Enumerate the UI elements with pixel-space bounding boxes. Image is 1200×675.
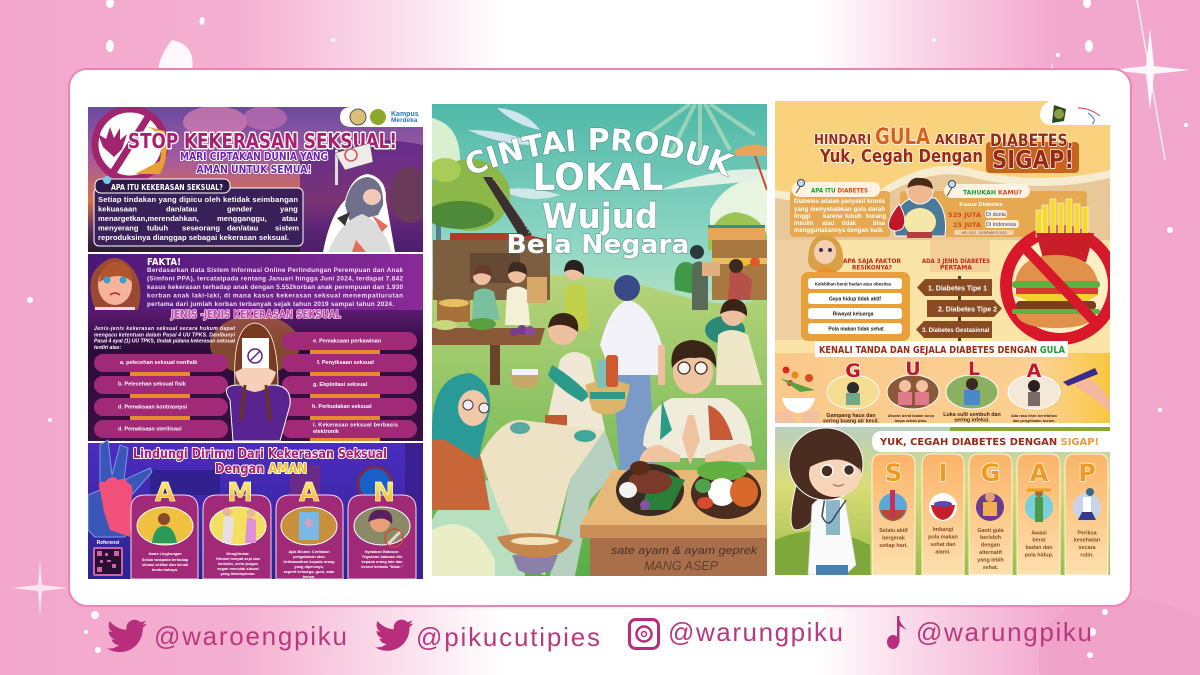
text: definition box: dan/atau	[166, 204, 198, 214]
qr code reference	[93, 540, 123, 576]
card: I: alami.	[935, 550, 951, 556]
banner heading	[872, 431, 1110, 452]
panel: apa itu diabetes: atau	[822, 221, 835, 227]
captions: dan penglihatan buram.	[1013, 419, 1055, 423]
icon: twitter bird 1	[107, 620, 147, 652]
title: LOKAL	[532, 156, 664, 199]
card: ajak bicara: pengalaman atau	[293, 554, 326, 559]
card: I: Imbangi	[933, 527, 954, 533]
text: jenis intro	[94, 326, 236, 351]
card: P: P	[1078, 459, 1096, 487]
signpost: diabetes types: 2. Diabetes Tipe 2	[938, 306, 997, 314]
panel: tahukah kamu: Di dunia	[986, 212, 1006, 218]
illustration: girl holding paper	[226, 323, 290, 441]
panel: gula signs: U	[905, 358, 921, 380]
card: S: Selalu aktif	[879, 528, 908, 534]
banner heading: YUK, CEGAH DIABETES DENGAN SIGAP!	[879, 437, 1099, 448]
illustration: woman with protest sign	[323, 143, 395, 252]
subtitle: AMAN UNTUK SEMUA!	[196, 164, 312, 176]
heading: faktor resiko	[843, 257, 901, 272]
card: nyatakan batasan: kepada orang lain dan	[361, 559, 403, 564]
panel: gula signs: G	[845, 360, 861, 382]
card: S: S	[885, 459, 902, 487]
figure: man with glasses	[640, 340, 755, 465]
subtitle	[180, 151, 328, 176]
text: jenis intro: Pasal 4 ayat (1) UU TPKS, tindak pidana kekerasan seksual	[94, 338, 236, 344]
poster: Cinta Produk Lokal	[432, 104, 767, 576]
section: fakta	[88, 254, 423, 310]
card: menghindar: yang tidaknyaman.	[220, 571, 256, 576]
text: definition box: atau	[282, 214, 298, 223]
panel: apa itu diabetes: yang menyebabkan gula darah	[794, 207, 885, 213]
card: A: A	[1030, 459, 1049, 487]
title: AKIBAT	[935, 133, 985, 148]
letters: AMAN: N	[373, 478, 395, 508]
title: Bela Negara	[506, 230, 690, 260]
text: sign	[611, 545, 758, 573]
letters: AMAN: A	[299, 478, 319, 508]
letters: AMAN	[154, 482, 393, 502]
card: I: I	[939, 459, 947, 487]
card: nyatakan batasan	[348, 495, 416, 579]
plate: satay	[616, 461, 685, 516]
title: CINTAI PRODUK	[466, 127, 736, 178]
heading: lindungi: Dengan AMAN	[215, 462, 307, 477]
card: A: badan dan	[1026, 545, 1052, 551]
card: I: pola makan	[928, 534, 958, 540]
panel: apa itu diabetes: tubuh	[845, 214, 862, 220]
list: right types of violence: g. Ekploitasi seksual	[313, 382, 368, 388]
background and hills	[775, 101, 1110, 357]
card: A: Awasi	[1031, 530, 1047, 536]
card: awas: Selalu waspada terhadap	[142, 557, 189, 562]
card: menghindar	[203, 495, 271, 579]
card: nyatakan batasan: berani berkata "tidak."	[361, 564, 403, 569]
card: ajak bicara: teman.	[303, 574, 315, 579]
card: P: kesehatan	[1074, 538, 1100, 544]
logo pill: Merdeka	[391, 117, 418, 124]
poster: Stop Kekerasan Seksual	[88, 106, 430, 579]
logo pill: Kampus	[391, 111, 419, 118]
title: Wujud	[542, 197, 658, 237]
card: awas: situasi sekitar dan kenali	[142, 562, 188, 567]
poster: Hindari Gula	[775, 101, 1114, 575]
text: jenis intro: terdiri atas:	[94, 345, 122, 351]
heading: kenali tanda	[815, 341, 1068, 357]
panel: risk factor list: Pola makan tidak sehat	[828, 326, 884, 332]
title: HINDARI	[814, 133, 871, 148]
card: P	[1065, 454, 1108, 575]
card: ajak bicara: yang dipercaya,	[294, 564, 324, 569]
panel: apa itu diabetes: tidak	[842, 221, 857, 227]
panel: apa itu diabetes: bisa	[873, 221, 886, 227]
illustration: overweight man with blood drop	[888, 178, 946, 238]
list: right types of violence: l. Kekerasan seksual berbasis	[313, 422, 398, 428]
captions: Luka sulit sembuh dan	[943, 412, 1001, 418]
card: awas: Awas Lingkungan	[148, 551, 182, 556]
card: G: sehat.	[983, 565, 999, 571]
ovals with letters	[827, 375, 1060, 409]
ground	[432, 275, 767, 576]
text: jenis intro: Jenis-jenis kekerasan seksual secara hukum dapat	[94, 326, 235, 332]
list: left types of violence: d. Pemaksaan sterilisasi	[118, 426, 182, 432]
text: fakta paragraph: kasus kekerasan terhadap anak dengan 5.552korban anak perempuan dan 1.930	[147, 284, 403, 291]
panel: risk factor list	[801, 272, 910, 341]
card: S	[872, 454, 915, 575]
logo corner	[1040, 101, 1110, 125]
panel: tahukah kamu: TAHUKAH KAMU?	[963, 188, 1022, 196]
heading pill: apa itu: APA ITU KEKERASAN SEKSUAL?	[111, 183, 223, 192]
panel: apa itu diabetes: Diabetes adalah penyakit kronis	[794, 199, 886, 205]
illustration: tree and traditional house	[426, 158, 550, 300]
text: fakta paragraph: pertama dari jumlah korban terbanyak sejak tahun 2019 sampai tahun 2024.	[147, 301, 394, 308]
logo pill	[340, 107, 423, 127]
card: G: dengan	[981, 542, 1000, 548]
title: SIGAP!	[992, 145, 1074, 174]
panel: tahukah kamu: MEI 2022 - DESEMBER 2023	[961, 231, 1007, 235]
card: ajak bicara: seperti keluarga, guru, atau	[284, 569, 335, 574]
captions: Ada rasa lelah berlebihan	[1011, 414, 1058, 418]
list: right types of violence: h. Perbudakan seksual	[312, 404, 372, 410]
text: sign: sate ayam & ayam geprek	[611, 545, 758, 557]
letters: AMAN: M	[227, 478, 253, 508]
captions: Gampang haus dan	[826, 413, 876, 419]
section: lindungi diri aman	[88, 440, 423, 579]
panel: apa itu diabetes: menggunakannya dengan baik.	[794, 228, 884, 234]
figures: background market people	[472, 245, 762, 385]
card: S: setiap hari.	[879, 543, 908, 549]
letters: AMAN: A	[155, 478, 175, 508]
illustration: sad woman	[90, 258, 140, 310]
panel: apa itu diabetes: APA ITU DIABETES	[811, 186, 868, 194]
handle: warungpiku tiktok: @warungpiku	[916, 617, 1092, 647]
card: G: G	[981, 459, 1000, 487]
captions: sering infeksi.	[954, 418, 990, 424]
card: G: Ganti gula	[977, 528, 1005, 534]
illustration: burger and fries prohibited	[1006, 199, 1114, 339]
title	[814, 125, 1079, 174]
heading: fakta: FAKTA!	[147, 257, 181, 268]
text: sign: MANG ASEP	[644, 559, 719, 573]
figure: batik painter in hijab	[432, 373, 525, 576]
illustration: thinking girl	[808, 235, 843, 273]
captions: Ukuran berat badan turun	[888, 414, 935, 418]
panel: gula signs: A	[1027, 360, 1042, 382]
panel: tahukah kamu: Kasus Diabetes	[959, 202, 1003, 208]
card: ajak bicara: Ajak Bicara: Ceritakan	[288, 549, 330, 554]
icon: forbidden hand	[95, 109, 167, 179]
card: G	[969, 454, 1012, 575]
heading: jenis: JENIS -JENIS KEKERASAN SEKSUAL	[170, 309, 341, 321]
panel: gula signs: L	[968, 358, 980, 380]
icon: twitter bird 2	[375, 620, 413, 651]
title: STOP KEKERASAN SEKSUAL!	[128, 129, 397, 153]
text: fakta paragraph: Berdasarkan data Sistem Informasi Online Perlindungan Perempuan dan Anak	[147, 267, 403, 274]
heading: jenis diabetes	[922, 257, 990, 272]
text: definition box: seseorang	[182, 224, 220, 232]
plate: geprek chicken	[691, 461, 761, 519]
pot and stand	[497, 533, 573, 574]
panel: apa itu diabetes: karena	[823, 214, 843, 220]
text: definition box: Setiap tindakan yang dipicu oleh ketidak seimbangan	[98, 195, 298, 204]
panel: tahukah kamu: 529 JUTA	[948, 212, 981, 219]
captions: tanpa sebab jelas.	[895, 419, 927, 423]
illustration: doctor girl	[789, 428, 863, 575]
subtitle: MARI CIPTAKAN DUNIA YANG	[180, 151, 328, 163]
card: A: berat	[1032, 538, 1046, 544]
panel: apa itu diabetes	[790, 180, 890, 237]
heading: kenali tanda: KENALI TANDA DAN GEJALA DIABETES DENGAN GULA	[819, 345, 1066, 356]
illustration: pen and hand	[1063, 368, 1110, 412]
heading: faktor resiko: RESIKONYA?	[852, 264, 892, 272]
figure: man seen from behind	[600, 275, 665, 470]
card: A	[1017, 454, 1060, 575]
list: left types of violence: b. Pelecehan seksual fisik	[118, 382, 187, 388]
sky and clouds	[432, 104, 767, 304]
panel: gula signs	[775, 353, 1110, 424]
list: left types of violence: d. Pemaksaan kontrasepsi	[118, 404, 188, 410]
card: ajak bicara	[276, 495, 343, 579]
card: I	[922, 454, 964, 575]
heading: lindungi	[133, 447, 387, 477]
figure: woman with basket	[545, 313, 630, 430]
captions: sering buang air kecil.	[823, 418, 879, 424]
heading: lindungi: Lindungi Dirimu Dari Kekerasan Seksual	[133, 447, 387, 462]
text: fakta paragraph	[147, 267, 403, 308]
text: fakta paragraph: (Simfoni PPA), tercatatpada rentang Januari hingga Juni 2024, terdapat 7.842	[147, 276, 403, 282]
list: right types of violence: e. Pemaksaan perkawinan	[313, 338, 382, 344]
panel: tahukah kamu: 25 JUTA	[953, 222, 981, 229]
text: definition box: menyerang	[98, 224, 139, 232]
table with produce	[432, 299, 545, 388]
white main panel	[69, 69, 1131, 606]
text: definition box: kekuasaan	[98, 204, 137, 214]
panel: apa itu diabetes: tinggi	[794, 214, 811, 220]
panel: risk factor list: Kelebihan berat badan atau obesitas	[815, 282, 892, 286]
list: right types of violence: f. Penyiksaan seksual	[317, 360, 374, 366]
card: nyatakan batasan: Nyatakan Batasan:	[365, 549, 399, 554]
card: G: berlebih	[980, 535, 1001, 541]
title: GULA	[875, 125, 930, 150]
list: left types of violence: a. pelecehan seksual nonfisik	[120, 360, 198, 366]
text: fakta paragraph: korban anak laki-laki, di mana kasus kekerasan seksual menempatiurutan	[147, 292, 403, 300]
signpost: diabetes types: 3. Diabetes Gestasional	[922, 328, 990, 334]
heading: faktor resiko: APA SAJA FAKTOR	[843, 257, 901, 265]
card: A: pola hidup.	[1025, 552, 1054, 558]
handle: warungpiku instagram: @warungpiku	[668, 617, 843, 647]
title	[466, 127, 736, 260]
card: nyatakan batasan: Tegaskan batasan diri	[362, 554, 402, 559]
card: ajak bicara: kekhawatiran kepada orang	[283, 559, 335, 564]
text: definition box: reproduksinya dianggap sebagai kekerasan seksual.	[98, 233, 289, 242]
panel: sigap prevention	[775, 427, 1110, 575]
illustration: salad bowl	[775, 366, 818, 423]
footer social handles	[107, 616, 1092, 652]
title: Yuk, Cegah Dengan	[819, 146, 983, 167]
card: awas: tanda bahaya.	[152, 567, 178, 572]
list: right types of violence	[282, 332, 417, 438]
card: P: rutin.	[1080, 552, 1094, 558]
heading: jenis diabetes: PERTAMA	[940, 264, 972, 272]
card: awas	[131, 495, 198, 579]
text: definition box: dan/atau	[227, 224, 259, 232]
text: definition box	[94, 188, 303, 246]
captions	[823, 412, 1058, 424]
card: menghindar: segan menolak situasi	[217, 566, 259, 571]
section: jenis-jenis	[88, 309, 423, 441]
card: menghindar: Menghindar:	[226, 551, 250, 556]
text: definition box: sistem	[275, 224, 299, 232]
text: definition box: menargetkan,merendahkan,	[98, 214, 199, 223]
card: P: Periksa	[1077, 530, 1098, 536]
card: menghindar: Hindari tempat sepi dan	[216, 556, 261, 561]
panel: risk factor list: Riwayat keluarga	[833, 312, 874, 318]
text: definition box: tubuh	[147, 224, 168, 232]
handle: waroengpiku: @waroengpiku	[154, 621, 347, 651]
title: DIABETES,	[990, 131, 1073, 151]
list: right types of violence: elektronik	[313, 429, 340, 435]
food table with plates	[580, 461, 767, 576]
icon: instagram	[630, 620, 658, 648]
text: definition box: mengganggu,	[217, 214, 267, 223]
panel: tahukah kamu: Di Indonesia	[986, 222, 1016, 228]
heading pill: apa itu	[95, 176, 230, 193]
panel: tahukah kamu	[900, 180, 1087, 237]
panel: risk factor list: Gaya hidup tidak aktif	[829, 296, 881, 302]
card: P: secara	[1078, 545, 1097, 551]
signpost: diabetes types: 1. Diabetes Tipe 1	[928, 286, 987, 292]
list: left types of violence	[94, 354, 228, 438]
section: stop heading and definition	[88, 106, 430, 252]
icon: hand and fist	[88, 440, 152, 537]
card: menghindar: berisiko, serta jangan	[218, 561, 259, 566]
card: G: yang lebih	[977, 558, 1004, 564]
signpost: diabetes types	[916, 276, 1002, 344]
panel: apa itu diabetes: insulin	[794, 221, 814, 227]
card: G: alternatif	[979, 550, 1002, 556]
text: definition box: yang	[280, 204, 298, 214]
illustration: market stall	[674, 144, 767, 300]
card: I: sehat dan	[930, 542, 956, 548]
card: S: bergerak	[882, 536, 905, 542]
batik cloth	[480, 420, 618, 576]
qr code reference: Referensi	[97, 540, 120, 546]
panel: apa itu diabetes: kurang	[866, 214, 886, 220]
handle: pikucutipies: @pikucutipies	[416, 622, 600, 652]
heading: jenis diabetes: ADA 3 JENIS DIABETES	[922, 257, 990, 265]
text: definition box: gender	[227, 204, 252, 214]
text: jenis intro: mengacu ketentuan dalam Pasal 4 UU TPKS. Danibunyi	[94, 332, 236, 338]
icon: music note tiktok	[887, 616, 907, 649]
